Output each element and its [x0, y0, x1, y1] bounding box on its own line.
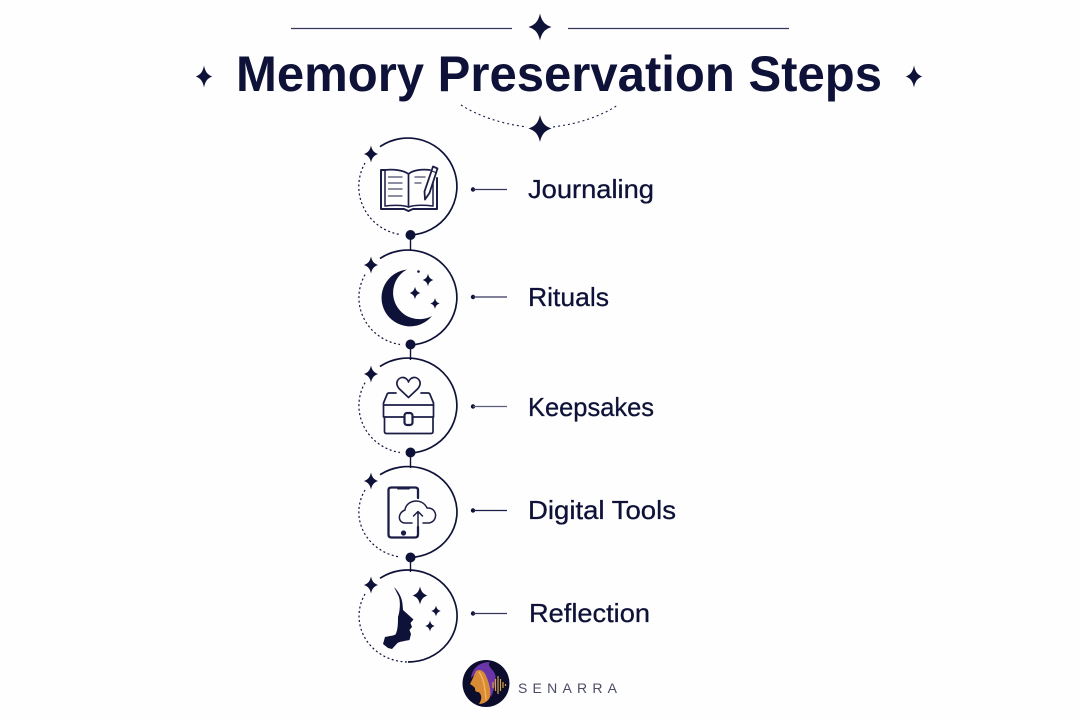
step 5 ring [359, 570, 457, 662]
step 4: digital tools [359, 467, 676, 562]
step 3 ring [359, 358, 457, 458]
header ornament: dotted arc and star [461, 105, 618, 142]
step 1 ring [359, 138, 457, 240]
step 2: rituals [359, 250, 609, 350]
header ornament: top rule and star [291, 14, 789, 40]
connector to label 2 [471, 295, 507, 299]
step 5: reflection [359, 570, 650, 662]
step 4 ring [359, 467, 457, 562]
connector stems between steps [410, 235, 412, 572]
icon: phone with cloud upload [388, 488, 436, 538]
icon: keepsake box with heart [384, 377, 434, 434]
label: rituals: Rituals [528, 282, 609, 312]
connector to label 1 [471, 187, 507, 192]
logo badge [462, 660, 510, 707]
label: reflection: Reflection [529, 598, 650, 628]
label: digital tools: Digital Tools [528, 495, 676, 525]
label: keepsakes: Keepsakes [528, 392, 654, 422]
step 3: keepsakes [359, 358, 654, 458]
connector to label 4 [471, 508, 507, 513]
step 2 ring [359, 250, 457, 350]
icon: open book with pen [381, 166, 438, 211]
left title star [196, 66, 212, 88]
brand logo [462, 660, 618, 707]
icon: face silhouette and stars [383, 586, 441, 649]
title: Memory Preservation Steps [236, 46, 882, 102]
brand name: SENARRA [518, 680, 618, 696]
connector to label 5 [471, 611, 507, 616]
right title star [906, 66, 922, 88]
icon: crescent moon and stars [382, 270, 440, 326]
connector to label 3 [471, 404, 507, 409]
label: journaling: Journaling [528, 174, 654, 204]
step 1: journaling [359, 138, 654, 240]
